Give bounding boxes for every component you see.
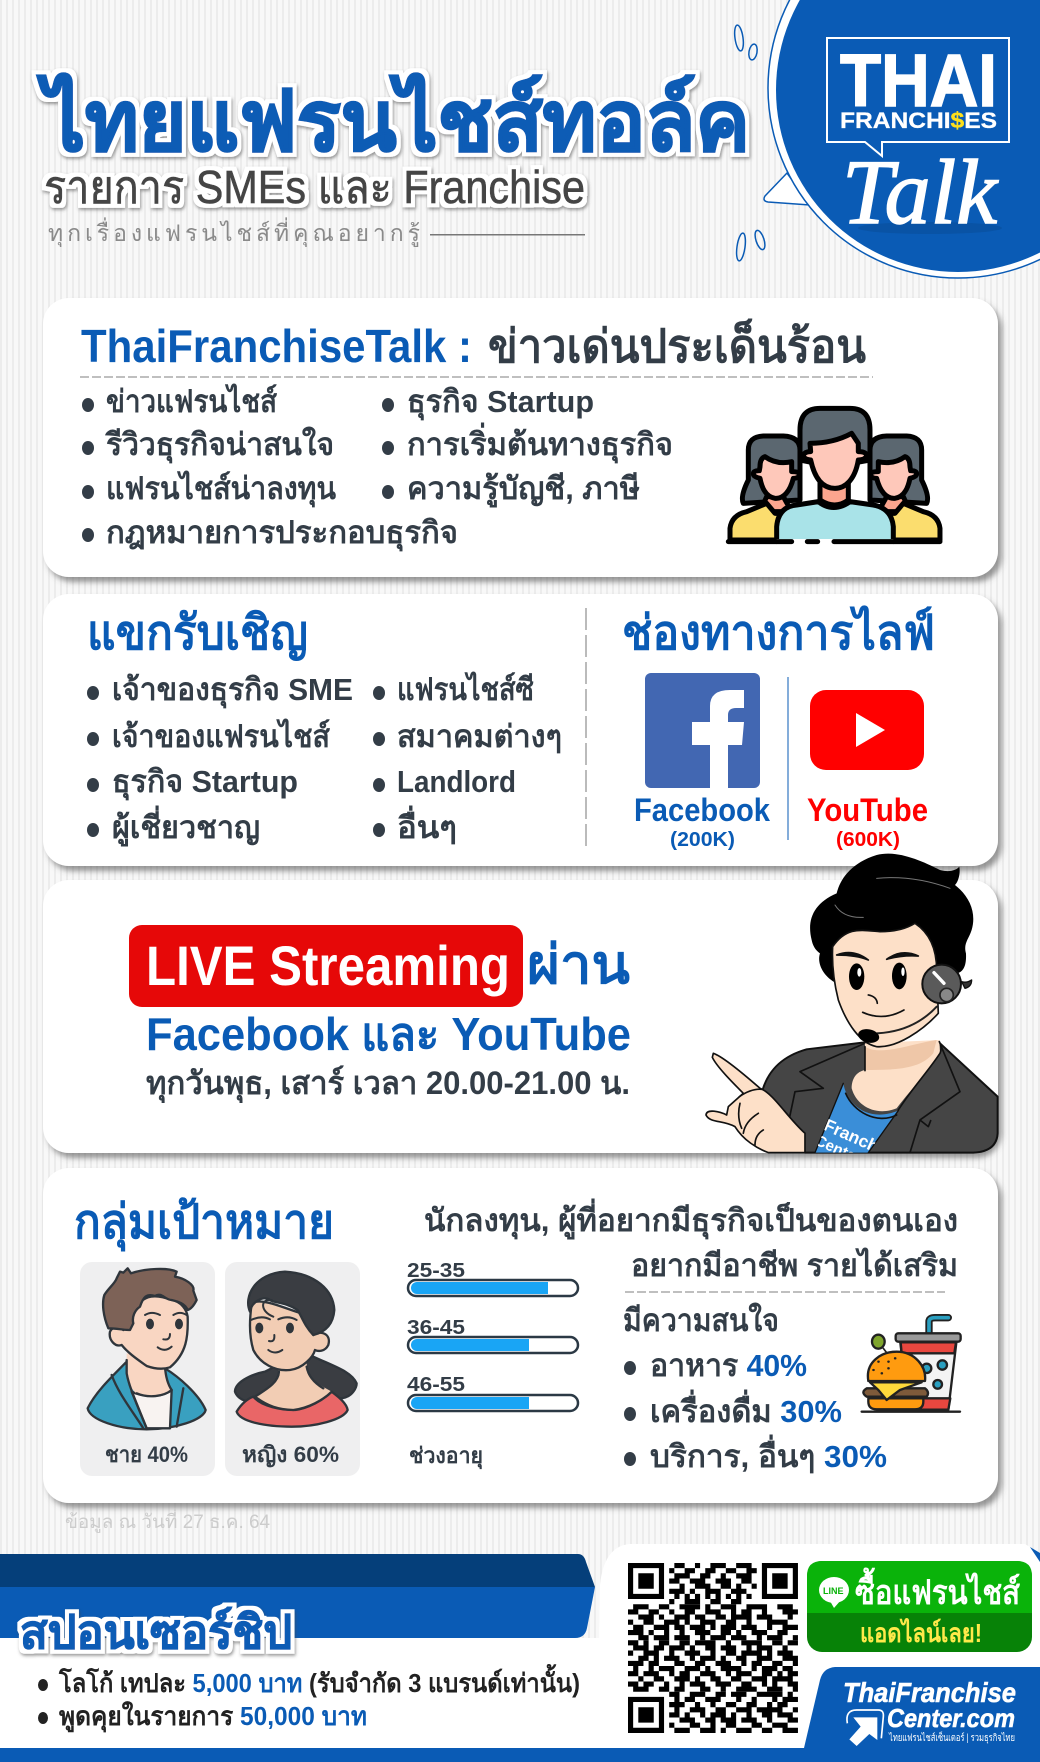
section: sponsorship [0, 1554, 1040, 1762]
text: via: ผ่าน [527, 935, 630, 995]
list: guests: Landlord [397, 764, 516, 799]
list: interests [623, 1302, 887, 1474]
heading: guests: แขกรับเชิญ [87, 607, 308, 661]
illustration: host with headset [706, 854, 998, 1167]
icon: arrow [847, 1710, 883, 1746]
list: guests: เจ้าของแฟรนไชส์ [112, 718, 330, 754]
list: interests: บริการ, อื่นๆ 30% [650, 1434, 887, 1474]
logo: ThaiFranchiseCenter.com [804, 1667, 1040, 1748]
badge: LIVE Streaming: LIVE Streaming [146, 934, 510, 997]
list: news topics: รีวิวธุรกิจน่าสนใจ [105, 426, 334, 464]
logo: ThaiFranchiseCenter.com: Center.com [887, 1703, 1015, 1733]
list: sponsorship prices: โลโก้ เทปละ 5,000 บาท (รับจำกัด 3 แบรนด์เท่านั้น) [58, 1663, 580, 1698]
list: guests [87, 671, 562, 847]
text: platforms: Facebook และ YouTube [146, 1008, 631, 1060]
panel: ThaiFranchiseTalk hot news [43, 298, 998, 577]
badge: LIVE Streaming [129, 925, 523, 1007]
list: sponsorship prices: พูดคุยในรายการ 50,000 บาท [59, 1701, 367, 1733]
panel: target audience [43, 1168, 998, 1503]
chart: age ranges: 25-35 [407, 1260, 465, 1282]
card: female 60% [225, 1262, 360, 1476]
logo badge: Thai Franchises Talk: FRANCHI $ES [840, 108, 997, 133]
text: audience description: นักลงทุน, ผู้ที่อยากมีธุรกิจเป็นของตนเอง [424, 1198, 958, 1240]
list: news topics: ข่าวแฟรนไชส์ [106, 383, 277, 419]
panel: live streaming [43, 854, 998, 1167]
QR code [628, 1566, 798, 1730]
list: sponsorship prices [38, 1663, 580, 1733]
icon: LINE [819, 1577, 849, 1608]
list: news topics: การเริ่มต้นทางธุรกิจ [407, 422, 673, 464]
chart: age ranges: ช่วงอายุ [409, 1443, 483, 1470]
logo badge: Thai Franchises Talk: THAI [840, 39, 997, 122]
decorative ovals [733, 25, 767, 261]
label: YouTube followers: YouTube [807, 792, 928, 828]
icon: people group [728, 408, 940, 542]
card: male 40% [80, 1262, 215, 1476]
label: YouTube followers [807, 792, 928, 851]
icon: Facebook [645, 673, 760, 788]
list: interests: มีความสนใจ [623, 1302, 779, 1338]
logo: ThaiFranchiseCenter.com: ThaiFranchise [843, 1677, 1016, 1708]
panel: contact [598, 1544, 1040, 1748]
icon: LINE: LINE [823, 1586, 844, 1596]
heading: hot news [81, 318, 867, 372]
list: news topics: กฎหมายการประกอบธุรกิจ [106, 515, 458, 552]
list: guests: ธุรกิจ Startup [112, 764, 298, 801]
logo badge: Thai Franchises Talk: Talk [842, 141, 999, 243]
heading: target: กลุ่มเป้าหมาย [74, 1196, 334, 1252]
list: news topics: ความรู้บัญชี, ภาษี [407, 471, 640, 508]
heading: hot news: ThaiFranchiseTalk : [81, 320, 472, 372]
button: LINE buy franchise: แอดไลน์เลย! [860, 1617, 982, 1648]
heading: live channels: ช่องทางการไลฟ์ [622, 604, 935, 660]
card: female 60%: หญิง 60% [242, 1442, 339, 1468]
data date note: ข้อมูล ณ วันที่ 27 ธ.ค. 64 [65, 1508, 270, 1533]
list: guests: ผู้เชี่ยวชาญ [112, 805, 260, 847]
label: YouTube followers: (600K) [836, 829, 900, 851]
title: ไทยแฟรนไชส์ทอล์ค [36, 73, 750, 168]
illustration: host with headset: Center [812, 1132, 864, 1167]
list: news topics: แฟรนไชส์น่าลงทุน [106, 470, 336, 508]
chart: age ranges [407, 1260, 578, 1470]
heading: sponsorship: สปอนเซอร์ชิป [20, 1606, 292, 1658]
list: guests: เจ้าของธุรกิจ SME [112, 672, 353, 709]
label: Facebook followers [634, 792, 770, 851]
button: LINE buy franchise [807, 1561, 1032, 1652]
chart: age ranges: 36-45 [407, 1317, 465, 1339]
heading: hot news: ข่าวเด่นประเด็นร้อน [488, 318, 867, 372]
panel: guests and live channels [43, 594, 998, 866]
illustration: host with headset: Franch [821, 1115, 882, 1156]
text: audience description [424, 1198, 958, 1283]
list: interests: เครื่องดื่ม 30% [650, 1389, 842, 1429]
list: interests: อาหาร 40% [650, 1348, 807, 1383]
list: news topics: ธุรกิจ Startup [407, 384, 594, 421]
icon: YouTube [810, 690, 924, 770]
label: Facebook followers: Facebook [634, 792, 770, 828]
chart: age ranges: 46-55 [407, 1374, 465, 1396]
list: guests: แฟรนไชส์ซี [397, 671, 534, 707]
list: news topics [82, 383, 673, 552]
tagline: ทุกเรื่องแฟรนไชส์ที่คุณอยากรู้ [48, 217, 420, 247]
text: schedule: ทุกวันพุธ, เสาร์ เวลา 20.00-21.00 น. [146, 1065, 630, 1104]
list: guests: สมาคมต่างๆ [397, 719, 562, 754]
list: guests: อื่นๆ [397, 805, 457, 845]
icon: burger and drink [862, 1318, 961, 1412]
logo badge: Thai Franchises Talk [764, 0, 1040, 278]
subtitle: รายการ SMEs และ Franchise [44, 161, 585, 213]
text: audience description: อยากมีอาชีพ รายได้เสริม [631, 1247, 958, 1283]
label: Facebook followers: (200K) [670, 829, 735, 851]
card: male 40%: ชาย 40% [105, 1442, 188, 1467]
